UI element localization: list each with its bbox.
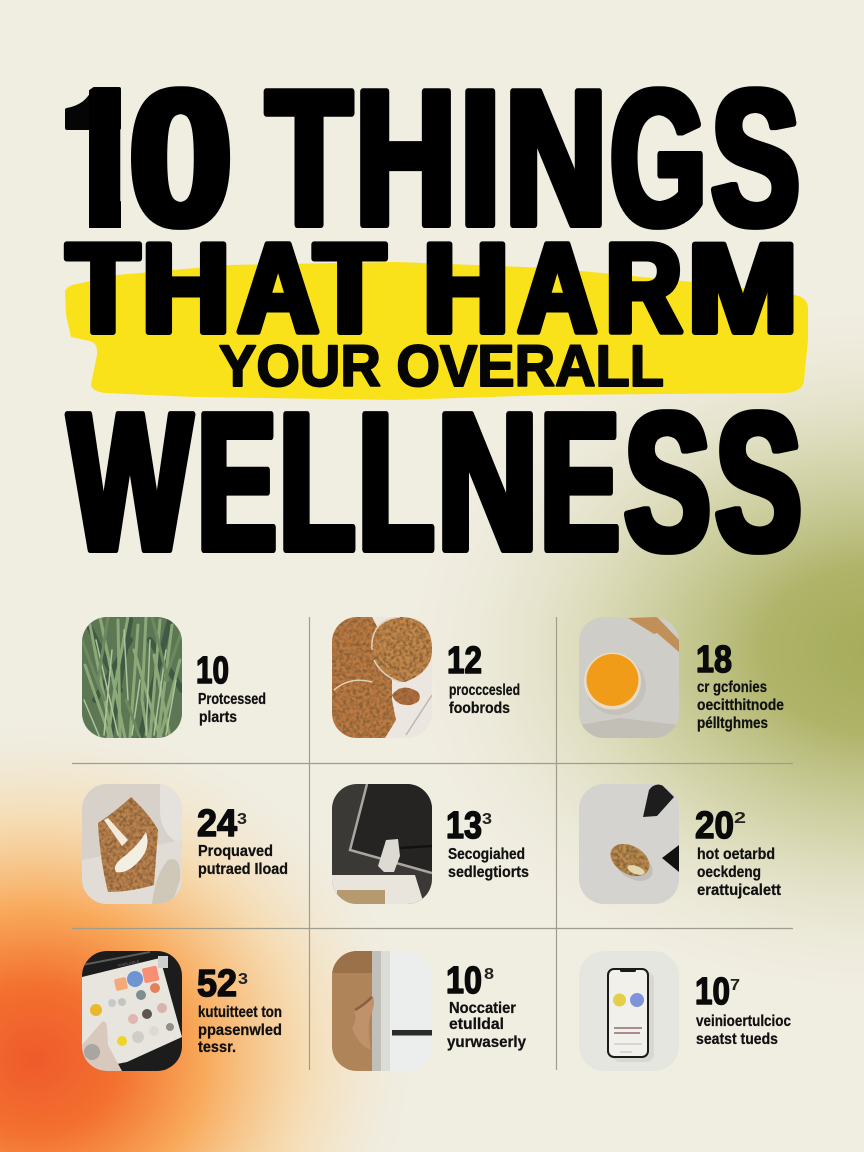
- label: [447, 1000, 526, 1051]
- label: ppasenwled: [198, 1022, 282, 1039]
- number: 24: [197, 803, 237, 845]
- number: 13: [446, 805, 482, 847]
- panel: item 7: [82, 951, 282, 1071]
- number: 10: [196, 650, 229, 692]
- image: tablet with app icons: AVAILABLE: [117, 958, 140, 968]
- title line: WELLNESS: [69, 372, 801, 592]
- label: sedlegtiorts: [448, 864, 529, 881]
- image: fried food: [332, 617, 432, 738]
- label: Noccatier: [449, 1000, 516, 1017]
- title line: WELLNESS: L: [358, 373, 434, 591]
- panel: item 2: [332, 617, 520, 738]
- label: plarts: [199, 709, 237, 726]
- label: [697, 679, 784, 732]
- label: yurwaserly: [447, 1034, 526, 1051]
- label: procccesled: [449, 682, 520, 699]
- label: seatst tueds: [696, 1031, 778, 1048]
- title line: 10 THINGS: S: [712, 51, 800, 267]
- label: [696, 1013, 791, 1048]
- panel: item 8: [332, 951, 526, 1071]
- image: toast and black tools: [579, 784, 679, 904]
- panel: item 6: [579, 784, 781, 904]
- label: cr gcfonies: [697, 679, 767, 696]
- label: tessr.: [198, 1039, 236, 1056]
- title line: WELLNESS: S: [716, 373, 801, 592]
- number: 3: [237, 811, 247, 828]
- title line: 10 THINGS: I: [460, 51, 500, 266]
- title line: WELLNESS: W: [69, 374, 191, 592]
- title line: 10 THINGS: T: [267, 50, 351, 266]
- title line: THAT HARM: M: [688, 218, 798, 359]
- label: erattujcalett: [697, 882, 781, 899]
- number: 7: [730, 977, 740, 994]
- label: veinioertulcioc: [696, 1013, 791, 1030]
- title line: THAT HARM: H: [423, 219, 509, 360]
- number: 52: [197, 963, 237, 1005]
- image: cup of orange tea: [579, 617, 679, 738]
- label: oeckdeng: [697, 864, 761, 881]
- number: 10: [695, 971, 730, 1013]
- image: bread with cream: [82, 784, 182, 904]
- image: tablet with app icons: [82, 951, 182, 1071]
- number: 12: [447, 640, 482, 682]
- title line: 10 THINGS: N: [505, 50, 607, 266]
- label: putraed Iload: [198, 861, 288, 878]
- image: hand at white door: [332, 951, 432, 1071]
- number: 18: [696, 639, 732, 681]
- highlight: yellow brush stroke: [65, 262, 808, 400]
- label: foobrods: [449, 700, 510, 717]
- number: 8: [484, 966, 494, 983]
- title line: WELLNESS: S: [625, 373, 710, 592]
- number: 2: [734, 810, 746, 827]
- title line: 10 THINGS: G: [610, 50, 706, 266]
- panel: item 3: [579, 617, 784, 738]
- title line: WELLNESS: E: [198, 374, 276, 592]
- label: etulldal: [449, 1016, 504, 1033]
- label: Secogiahed: [448, 846, 525, 863]
- label: pélltghmes: [697, 715, 768, 732]
- image: device on dark surface: [332, 784, 432, 904]
- label: Protcessed: [198, 691, 266, 708]
- title line: THAT HARM: H: [142, 218, 230, 360]
- label: kutuitteet ton: [198, 1004, 282, 1021]
- number: 3: [238, 971, 248, 988]
- title line: 10 THINGS: [65, 86, 799, 230]
- label: [198, 1004, 282, 1056]
- title line: THAT HARM: T: [67, 218, 139, 360]
- title line: WELLNESS: L: [279, 373, 355, 591]
- number: 20: [695, 805, 734, 847]
- panel: item 9: [579, 951, 791, 1071]
- label: [449, 682, 520, 717]
- number: 10: [446, 960, 482, 1002]
- label: [198, 691, 266, 726]
- label: Proquaved: [198, 843, 273, 860]
- image: smartphone: [579, 951, 679, 1071]
- title line: WELLNESS: E: [540, 374, 619, 592]
- title line: WELLNESS: N: [437, 372, 538, 591]
- title line: THAT HARM: A: [238, 218, 318, 360]
- title line: YOUR OVERALL: YOUR OVERALL: [219, 334, 664, 399]
- title line: THAT HARM: [67, 217, 798, 360]
- label: [697, 846, 781, 899]
- panel: item 4: [82, 784, 288, 904]
- panel: item 1: [82, 617, 266, 738]
- title line: THAT HARM: T: [314, 217, 385, 359]
- number: 3: [482, 811, 492, 828]
- title: 10 things that harm your overall wellness: [64, 86, 808, 555]
- panel: item 5: [332, 784, 529, 904]
- label: oecitthitnode: [697, 697, 784, 714]
- title line: 10 THINGS: H: [355, 50, 456, 266]
- title line: THAT HARM: A: [518, 218, 597, 360]
- label: hot oetarbd: [697, 846, 775, 863]
- title line: THAT HARM: R: [606, 217, 682, 359]
- title line: 10 THINGS: 0: [129, 50, 232, 266]
- label: [198, 843, 288, 878]
- title line: 10 THINGS: 1: [56, 49, 145, 266]
- label: [448, 846, 529, 881]
- image: green herbs: [82, 617, 182, 738]
